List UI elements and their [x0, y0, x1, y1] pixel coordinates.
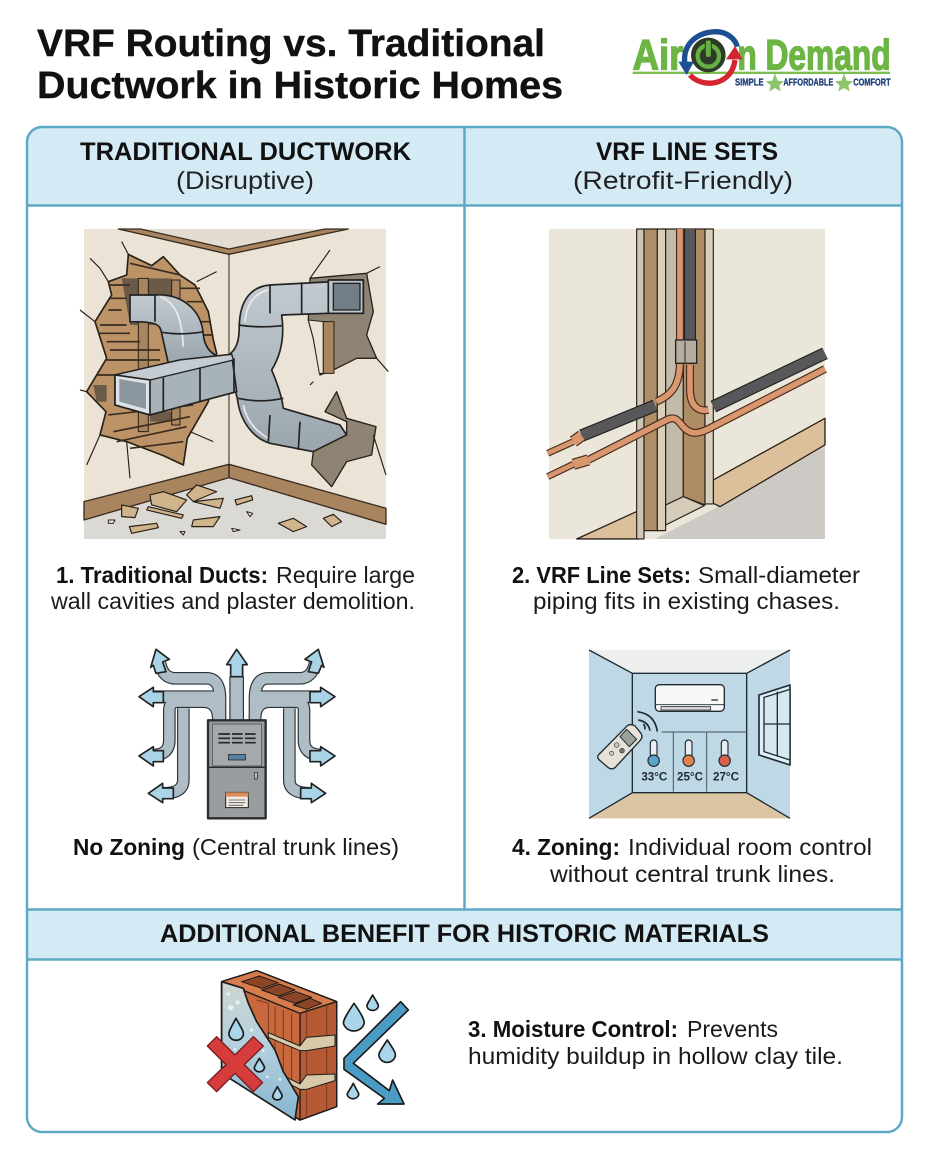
text: moisture control: [468, 1016, 843, 1069]
text: traditional ducts: Require large: [276, 562, 415, 588]
logo: Air On Demand: Air: [633, 31, 683, 79]
illustration: central furnace with trunk lines: [139, 649, 335, 818]
text: no zoning: (Central trunk lines): [192, 834, 399, 860]
illustration: zoned room with thermostats: [589, 650, 790, 818]
insulated lines: left and right: [582, 406, 655, 436]
title: Ductwork in Historic Homes: [37, 65, 563, 107]
logo: Air On Demand: COMFORT: [853, 77, 891, 88]
temperature readings: 33°C: [641, 769, 668, 783]
logo: Air On Demand: AFFORDABLE: [783, 77, 834, 88]
window: [759, 685, 790, 765]
logo: Air On Demand: SIMPLE: [735, 77, 764, 88]
temperature readings: 27°C: [713, 769, 739, 783]
trunk ducts: [153, 663, 322, 793]
text: VRF line sets: piping fits in existing chases.: [533, 588, 840, 614]
column heading: VRF line sets: [573, 138, 793, 195]
illustration: hollow clay tile and moisture: [207, 971, 408, 1120]
text: moisture control: 3. Moisture Control:: [468, 1016, 678, 1042]
illustration: VRF line sets in chase: [548, 229, 825, 539]
text: zoning: Individual room control: [628, 834, 872, 860]
title: VRF Routing vs. Traditional: [37, 23, 545, 65]
cracks: [80, 242, 388, 478]
clamp: [676, 340, 697, 363]
text: zoning: without central trunk lines.: [549, 861, 835, 887]
wall unit: [655, 685, 724, 711]
torn plaster flap: [312, 392, 376, 487]
text: traditional ducts: wall cavities and plaster demolition.: [50, 588, 415, 614]
red X mark: [207, 1037, 263, 1092]
deflection arrow: [344, 1002, 408, 1104]
text: VRF line sets: 2. VRF Line Sets:: [512, 562, 691, 588]
text: zoning: [512, 834, 872, 887]
temperature readings: [641, 769, 739, 783]
rear elbow duct: [130, 295, 217, 363]
wall chase: [637, 229, 713, 539]
remote control: [598, 725, 642, 769]
left wall opening with lath: [87, 254, 217, 465]
column heading: traditional ductwork: TRADITIONAL DUCTWORK: [80, 138, 411, 166]
text: no zoning: No Zoning: [73, 834, 185, 860]
illustration: torn wall with ductwork: [80, 229, 388, 539]
column heading: traditional ductwork: [80, 138, 411, 195]
temperature readings: 25°C: [677, 769, 703, 783]
text: zoning: 4. Zoning:: [512, 834, 620, 860]
text: moisture control: humidity buildup in hollow clay tile.: [468, 1043, 843, 1069]
thermometers: [648, 740, 730, 766]
text: VRF line sets: [512, 562, 860, 614]
title: [37, 23, 563, 107]
text: VRF line sets: Small-diameter: [698, 562, 860, 588]
column heading: VRF line sets: VRF LINE SETS: [596, 138, 778, 166]
air arrows: [139, 649, 335, 803]
front box duct: [115, 354, 237, 415]
debris on floor: [122, 485, 342, 533]
S-curve duct: [227, 280, 363, 452]
text: no zoning: [73, 834, 399, 860]
plaster layer: [222, 982, 298, 1120]
column heading: VRF line sets: (Retrofit-Friendly): [573, 167, 793, 195]
water drops: [229, 995, 395, 1100]
text: traditional ducts: [50, 562, 415, 614]
clay tile block: [222, 971, 337, 1120]
copper line set: [548, 229, 825, 477]
furnace cabinet: [208, 720, 266, 818]
text: traditional ducts: 1. Traditional Ducts:: [56, 562, 268, 588]
logo: Air On Demand: [633, 31, 891, 91]
text: moisture control: Prevents: [687, 1016, 778, 1042]
right wall opening: [308, 273, 377, 375]
column heading: traditional ductwork: (Disruptive): [176, 167, 314, 195]
insulated line: vertical: [672, 229, 708, 343]
heading: additional benefit: ADDITIONAL BENEFIT FOR HISTORIC MATERIALS: [160, 920, 769, 948]
